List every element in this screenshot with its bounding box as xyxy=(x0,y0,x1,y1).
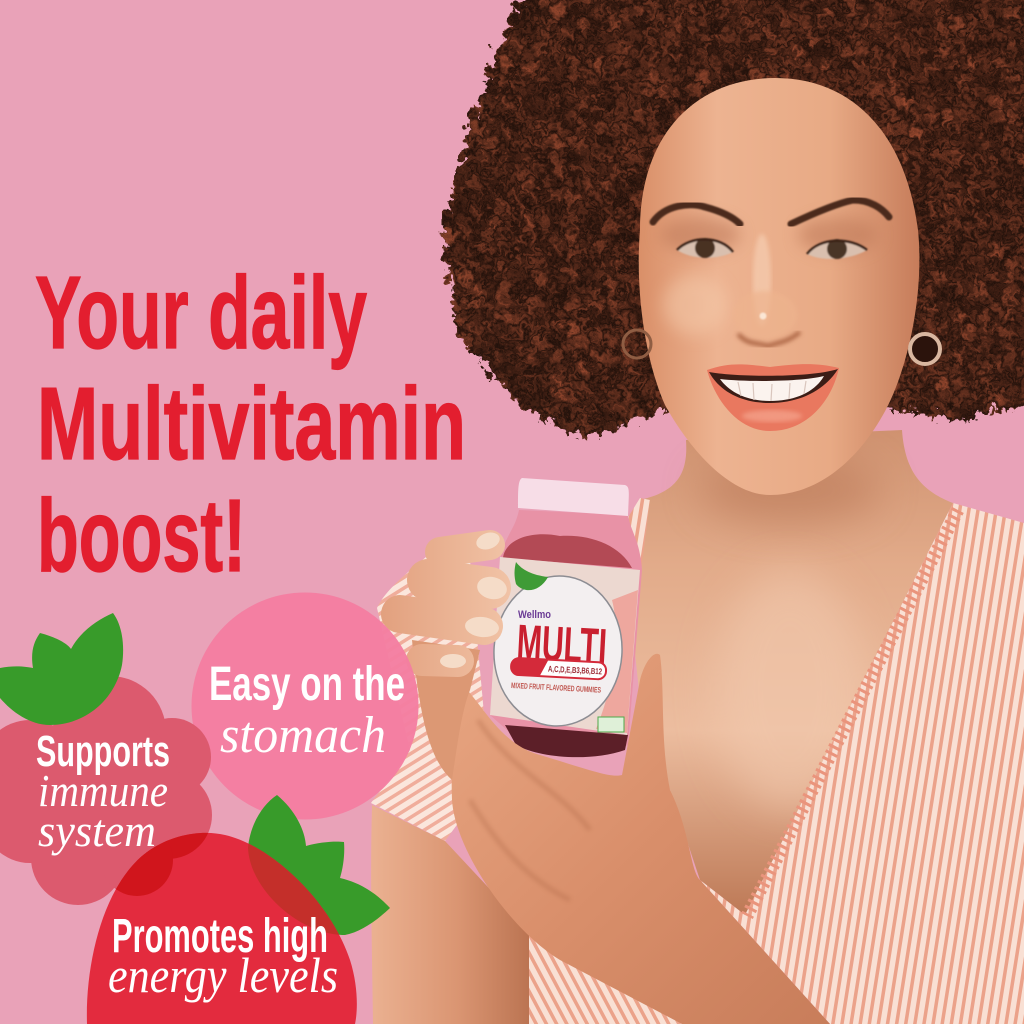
badge: promotes high energy levels strawberry: energy levels xyxy=(108,947,338,1003)
gluten free badge xyxy=(598,717,624,732)
eye right xyxy=(807,239,867,259)
badge: easy on the stomach xyxy=(192,592,418,820)
neck shadow xyxy=(700,456,880,524)
fingernails xyxy=(440,530,509,668)
badge: promotes high energy levels strawberry: Promotes high xyxy=(112,910,328,963)
hair xyxy=(439,0,1024,432)
eyebrow left xyxy=(653,205,740,224)
eye sockets xyxy=(660,217,878,253)
label MULTI: MULTI xyxy=(515,614,608,675)
badge: easy on the stomach: stomach xyxy=(220,707,386,764)
lower hand xyxy=(452,654,830,1024)
hand knuckle shading xyxy=(470,720,590,900)
gummies top xyxy=(503,534,632,568)
earring left xyxy=(623,330,651,358)
badge: supports immune system raspberry: system xyxy=(38,805,156,856)
headline: Your daily xyxy=(35,255,367,370)
raspberry leaf xyxy=(0,613,123,725)
dress neckline binding xyxy=(747,510,958,916)
label circle xyxy=(489,572,627,730)
bottle xyxy=(489,478,642,757)
sleeve strip by bottle xyxy=(610,498,650,580)
face xyxy=(639,78,919,495)
gummies bottom xyxy=(505,725,628,757)
badge: supports immune system raspberry xyxy=(0,613,212,905)
upper fingers xyxy=(400,530,509,668)
shoulders and chest xyxy=(625,430,953,915)
nose xyxy=(733,291,800,346)
chest highlight xyxy=(715,570,865,810)
cheek highlights xyxy=(663,275,727,335)
nose bridge highlight xyxy=(753,234,771,326)
vitamin pill: A,C,D,E,B3,B6,B12 xyxy=(548,664,602,676)
headline: Multivitamin xyxy=(37,366,466,481)
sleeve xyxy=(371,549,490,841)
label pink accents xyxy=(596,590,638,733)
label subtitle: MIXED FRUIT FLAVORED GUMMIES xyxy=(511,681,602,695)
eye left xyxy=(677,238,733,258)
badge: supports immune system raspberry: immune xyxy=(38,765,168,816)
photo: woman holding bottle xyxy=(371,0,1024,1024)
smile xyxy=(707,364,839,431)
headline xyxy=(35,255,466,593)
badge: promotes high energy levels strawberry xyxy=(86,795,390,1024)
vitamin pill xyxy=(510,658,606,680)
dress right panel xyxy=(700,503,1024,1024)
upper arm xyxy=(371,805,529,1024)
brand Wellmo: Wellmo xyxy=(518,609,551,621)
leaf logo xyxy=(514,562,548,590)
earring right xyxy=(910,334,940,364)
bottle glass xyxy=(490,510,642,754)
bottle cap xyxy=(518,478,629,516)
badge: supports immune system raspberry: Supports xyxy=(36,727,170,776)
dress lower left panel xyxy=(529,928,682,1024)
bottle label xyxy=(489,557,640,735)
strawberry leaf xyxy=(248,795,390,935)
eyebrow right xyxy=(791,200,889,224)
overlaps xyxy=(116,832,340,935)
upper palm xyxy=(412,640,480,780)
headline: boost! xyxy=(37,478,246,593)
strawberry body xyxy=(87,833,357,1024)
badge: easy on the stomach: Easy on the xyxy=(209,658,405,711)
